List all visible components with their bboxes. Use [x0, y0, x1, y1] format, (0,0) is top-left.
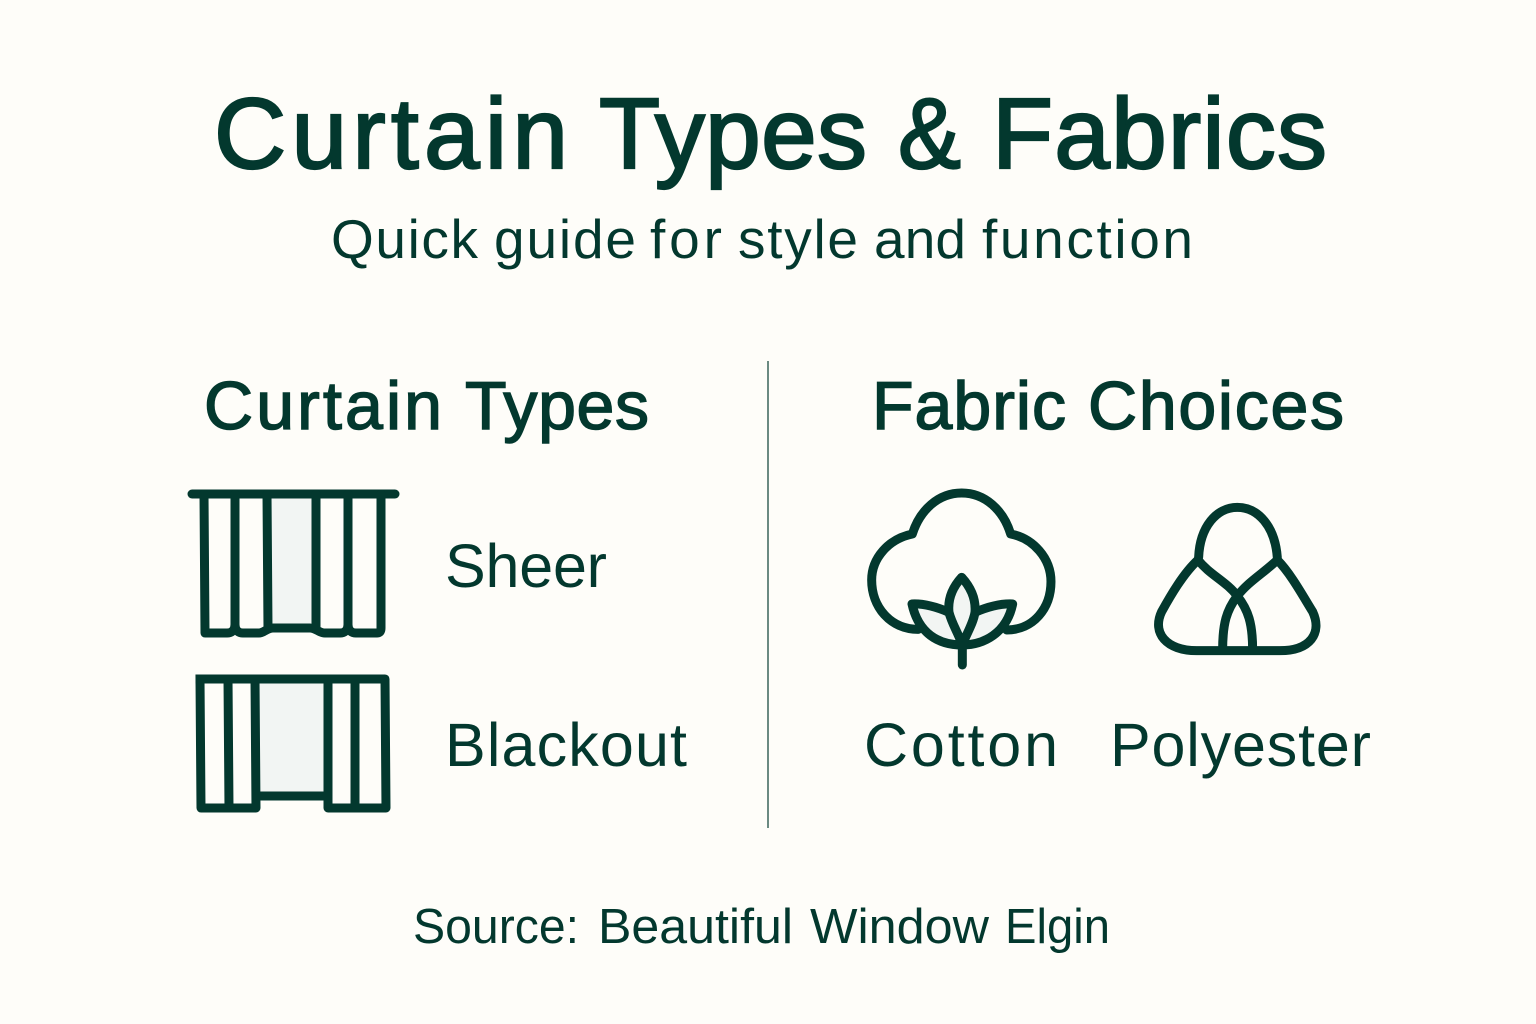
- icon: polyester fibres: [1159, 507, 1316, 651]
- label: polyester: Polyester: [1110, 711, 1371, 779]
- title: &: [898, 78, 961, 190]
- heading: fabric choices: Fabric: [872, 368, 1066, 444]
- source note: Elgin: [1005, 900, 1110, 954]
- subtitle: style: [738, 208, 858, 270]
- subtitle: and: [874, 208, 966, 270]
- subtitle: [331, 208, 1193, 270]
- subtitle: for: [650, 208, 722, 270]
- title: Curtain: [214, 78, 568, 190]
- title: Fabrics: [992, 78, 1327, 190]
- title: [214, 78, 1327, 190]
- label: sheer: Sheer: [445, 532, 607, 600]
- source note: Source:: [413, 900, 579, 954]
- heading: curtain types: [204, 368, 649, 444]
- heading: fabric choices: Choices: [1088, 368, 1344, 444]
- divider between columns: [767, 361, 769, 828]
- heading: fabric choices: [872, 368, 1344, 444]
- subtitle: Quick: [331, 208, 478, 270]
- subtitle: function: [982, 208, 1193, 270]
- source note: [413, 900, 1110, 954]
- icon: blackout curtain: [200, 679, 386, 808]
- source note: Beautiful: [598, 900, 793, 954]
- icon: cotton boll: [872, 493, 1051, 665]
- label: blackout: Blackout: [445, 711, 687, 779]
- subtitle: guide: [494, 208, 636, 270]
- source note: Window: [810, 900, 990, 954]
- heading: curtain types: Curtain: [204, 368, 442, 444]
- label: cotton: Cotton: [864, 711, 1058, 779]
- icon: sheer curtain: [192, 494, 395, 633]
- heading: curtain types: Types: [465, 368, 649, 444]
- title: Types: [599, 78, 867, 190]
